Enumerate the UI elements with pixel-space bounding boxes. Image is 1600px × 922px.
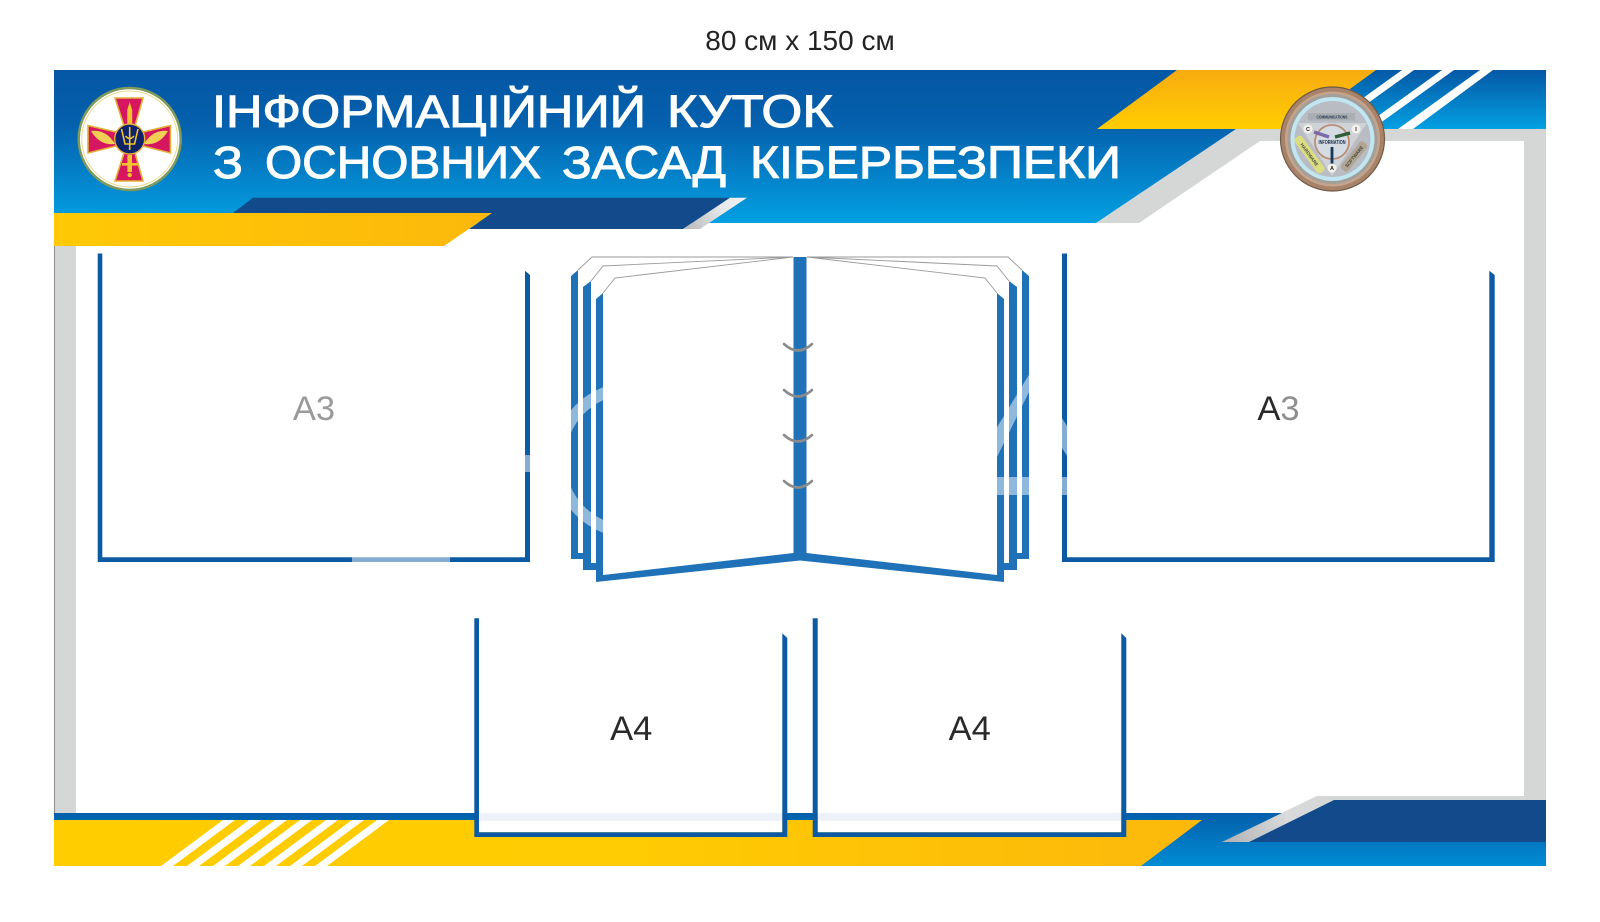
corner letters: I — [1355, 127, 1357, 133]
gray frame — [54, 129, 1546, 842]
header blue background — [54, 70, 1240, 223]
hardware pill: HARDWARE — [1299, 142, 1319, 167]
software pill: SOFTWARE — [1344, 145, 1364, 168]
sword — [122, 102, 138, 177]
yellow bar — [54, 213, 492, 246]
title: ОСНОВНИХ — [265, 137, 541, 188]
faint watermark bands — [352, 373, 1069, 563]
label A4: A4 — [610, 710, 652, 748]
title: КУТОК — [667, 86, 833, 137]
label A4: A4 — [949, 710, 991, 748]
navy band — [233, 198, 730, 229]
pocket A4 right — [813, 618, 1126, 837]
cross — [88, 98, 170, 181]
icon: cybersecurity seal — [1280, 87, 1384, 191]
silver sliver — [683, 198, 747, 229]
bottom white stripes — [161, 820, 389, 866]
bottom blue — [54, 813, 1546, 866]
corner letters: A — [1330, 166, 1334, 172]
bottom band — [54, 800, 1546, 866]
title: КІБЕРБЕЗПЕКИ — [750, 137, 1121, 188]
white diagonal stripes — [1320, 70, 1493, 129]
inner ring — [1315, 125, 1349, 159]
wings — [91, 131, 168, 144]
corner letters — [1304, 124, 1360, 172]
communications tag — [1308, 113, 1355, 120]
brochure holder book — [571, 257, 1029, 582]
binder rings — [784, 344, 812, 488]
pocket A3 right — [1062, 254, 1495, 562]
label A3: A3 — [293, 390, 335, 428]
bottom navy block — [1249, 800, 1546, 842]
corner letters: C — [1306, 127, 1310, 133]
trident medallion — [115, 124, 145, 154]
right side pages — [800, 257, 1029, 582]
title — [212, 86, 1121, 188]
connector bars — [1314, 132, 1350, 164]
icon: cybersecurity seal: COMMUNICATIONS — [1316, 115, 1348, 120]
title: ІНФОРМАЦІЙНИЙ — [212, 86, 646, 137]
header band — [54, 70, 1546, 246]
title: З — [213, 137, 243, 188]
pocket A4 left — [474, 618, 787, 837]
title: ЗАСАД — [562, 137, 726, 188]
label A3: A3 — [1257, 390, 1300, 428]
icon: cybersecurity seal: INFORMATION — [1318, 140, 1346, 146]
icon: air force emblem — [79, 88, 181, 190]
bottom yellow — [54, 820, 1202, 866]
left side pages — [571, 257, 800, 582]
pocket A3 left — [98, 254, 530, 562]
triangle — [1298, 123, 1367, 176]
size caption: 80 см х 150 см — [705, 25, 895, 56]
yellow parallelogram — [1097, 70, 1376, 129]
header right blue panel — [1236, 70, 1546, 129]
